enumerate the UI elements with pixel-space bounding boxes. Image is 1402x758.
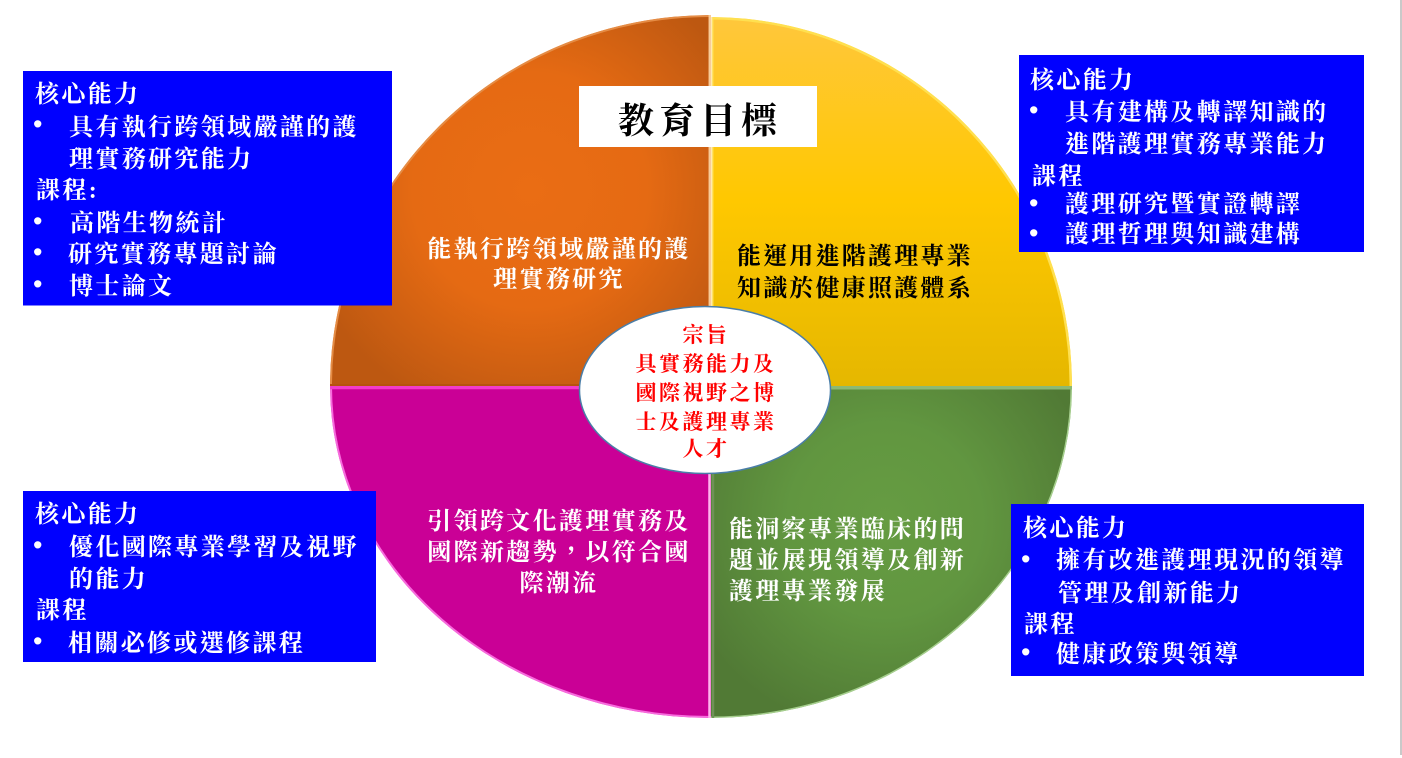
pie chart: four educational objectives — [330, 15, 1072, 718]
panel: leadership competencies and courses: 健康政策與領導 — [1056, 640, 1240, 668]
panel: international competencies and courses: 核心能力 — [35, 501, 140, 528]
panel: international competencies and courses: 相關必修或選修課程 — [68, 630, 305, 657]
panel: leadership competencies and courses: 課程 — [1024, 611, 1077, 638]
title box: 教育目標 — [618, 101, 782, 141]
panel: leadership competencies and courses: • — [1021, 544, 1030, 574]
panel: international competencies and courses — [23, 491, 376, 662]
panel: research competencies and courses: 理實務研究能力 — [69, 146, 253, 173]
panel: international competencies and courses: 優化國際專業學習及視野 — [69, 534, 359, 561]
center ellipse: mission: 人才 — [682, 437, 730, 461]
panel: knowledge competencies and courses — [1019, 55, 1364, 252]
quadrant: magenta international objective — [330, 386, 711, 718]
center ellipse: mission: 士及護理專業 — [636, 410, 777, 434]
panel: leadership competencies and courses: • — [1021, 637, 1030, 667]
panel: knowledge competencies and courses: 進階護理實務專業能力 — [1065, 131, 1328, 158]
objective text: magenta quadrant: 國際新趨勢，以符合國 — [427, 539, 691, 566]
center ellipse: mission: 具實務能力及 — [636, 352, 776, 376]
panel: research competencies and courses: • — [33, 206, 42, 236]
panel: research competencies and courses: 博士論文 — [69, 272, 174, 300]
window edge line — [1400, 0, 1402, 755]
panel: research competencies and courses: • — [33, 237, 42, 267]
objective text: green quadrant: 護理專業發展 — [729, 578, 887, 605]
panel: research competencies and courses: • — [33, 109, 42, 139]
panel: international competencies and courses: 課程 — [36, 597, 89, 624]
panel: international competencies and courses: • — [33, 626, 42, 656]
objective text: yellow quadrant: 能運用進階護理專業 — [737, 244, 973, 270]
panel: international competencies and courses: 的能力 — [69, 566, 148, 593]
panel: leadership competencies and courses: 擁有改進護理現況的領導 — [1056, 546, 1346, 574]
panel: research competencies and courses — [23, 71, 392, 306]
panel: knowledge competencies and courses: 護理研究暨實證轉譯 — [1065, 191, 1302, 218]
objective text: magenta quadrant: 引領跨文化護理實務及 — [427, 509, 691, 535]
objective text: green quadrant: 題並展現領導及創新 — [729, 546, 966, 574]
panel: research competencies and courses: 核心能力 — [35, 81, 140, 108]
objective text: orange quadrant: 能執行跨領域嚴謹的護 — [427, 237, 691, 263]
panel: leadership competencies and courses — [1011, 504, 1364, 676]
panel: research competencies and courses: • — [33, 269, 42, 299]
panel: knowledge competencies and courses: 護理哲理與知識建構 — [1065, 221, 1302, 248]
panel: knowledge competencies and courses: 具有建構及轉譯知識的 — [1065, 99, 1328, 126]
objective text: orange quadrant: 理實務研究 — [493, 266, 625, 293]
objective text: yellow quadrant: 知識於健康照護體系 — [737, 275, 973, 302]
objective text: green quadrant: 能洞察專業臨床的問 — [729, 517, 966, 543]
panel: knowledge competencies and courses: • — [1029, 218, 1038, 248]
quadrant: green leadership objective — [711, 386, 1072, 718]
panel: research competencies and courses: 具有執行跨領域嚴謹的護 — [69, 114, 359, 141]
panel: international competencies and courses: • — [33, 530, 42, 560]
quadrant: orange research objective — [330, 15, 711, 386]
panel: research competencies and courses: 研究實務專題討論 — [68, 241, 279, 268]
title box — [579, 86, 817, 147]
panel: leadership competencies and courses: 管理及創新能力 — [1058, 580, 1242, 607]
quadrant: yellow applied knowledge objective — [711, 17, 1072, 386]
panel: leadership competencies and courses: 核心能力 — [1023, 515, 1128, 542]
center ellipse: mission: 國際視野之博 — [636, 381, 776, 405]
center ellipse: mission — [580, 306, 830, 474]
panel: knowledge competencies and courses: • — [1029, 188, 1038, 218]
objective text: magenta quadrant: 際潮流 — [519, 570, 599, 597]
center ellipse: mission: 宗旨 — [682, 323, 730, 347]
panel: knowledge competencies and courses: • — [1029, 95, 1038, 125]
panel: knowledge competencies and courses: 課程 — [1032, 163, 1085, 190]
panel: knowledge competencies and courses: 核心能力 — [1030, 67, 1135, 94]
panel: research competencies and courses: 高階生物統計 — [70, 209, 228, 237]
panel: research competencies and courses: 課程: — [36, 177, 99, 204]
